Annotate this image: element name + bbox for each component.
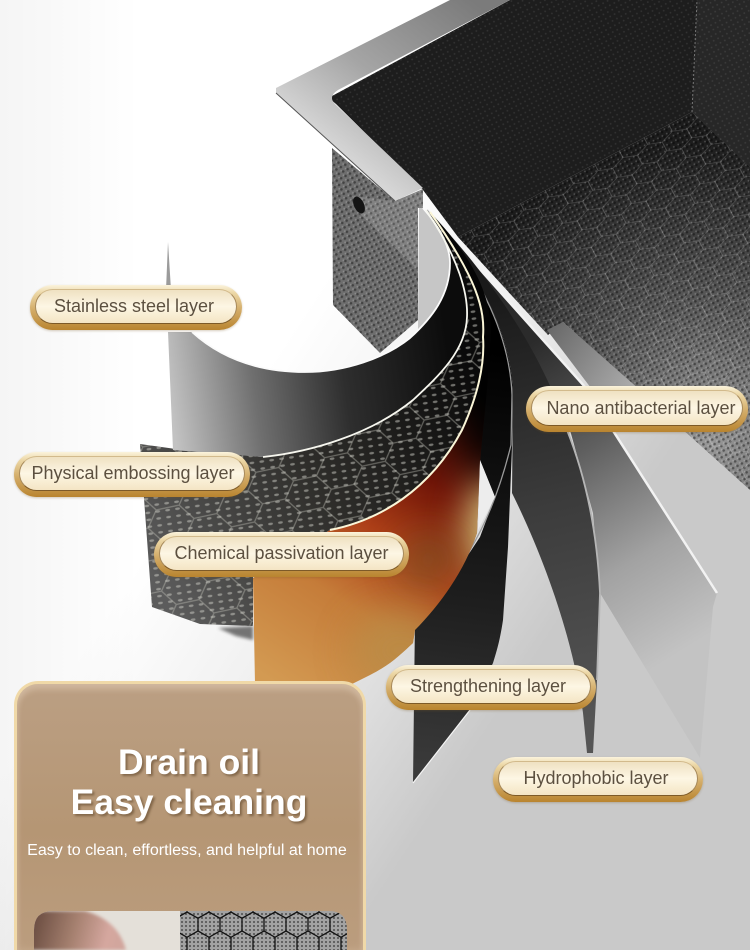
- sink basin: [276, 0, 750, 490]
- layer: chemical passivation sheet: [253, 212, 518, 690]
- back wall: [331, 0, 750, 237]
- layer: hydrophobic sheet: [427, 210, 717, 758]
- hexagon surface: [180, 911, 347, 950]
- heading: drain oil: Drain oil: [118, 742, 260, 782]
- label: stainless steel layer: [30, 285, 242, 330]
- label: hydrophobic layer: [493, 757, 703, 802]
- notch highlight: [478, 460, 495, 530]
- label: chemical passivation layer: Chemical passivation layer: [174, 543, 389, 563]
- layer: nano antibacterial sheet: [427, 210, 600, 753]
- layer: stainless steel sheet: [166, 208, 467, 457]
- heading: easy cleaning: Easy cleaning: [71, 782, 307, 822]
- layer: strengthening sheet: [413, 210, 513, 783]
- label: strengthening layer: Strengthening layer: [410, 676, 566, 696]
- colour blooms: [360, 401, 485, 678]
- right wall: [692, 0, 750, 167]
- basin floor: [458, 112, 750, 490]
- label: strengthening layer: [386, 665, 596, 710]
- subtitle: Easy to clean, effortless, and helpful at home: [27, 841, 347, 859]
- flange rim: [276, 0, 510, 201]
- inner face of steel: [418, 208, 450, 330]
- label: nano antibacterial layer: Nano antibacterial layer: [546, 398, 736, 418]
- drain hole: [351, 195, 367, 215]
- label: stainless steel layer: Stainless steel layer: [54, 296, 214, 316]
- label: physical embossing layer: [14, 452, 250, 497]
- photo: finger on textured surface: [34, 911, 347, 950]
- lower rim strip: [547, 322, 640, 400]
- label: nano antibacterial layer: [526, 386, 748, 432]
- label: physical embossing layer: Physical embossing layer: [31, 463, 235, 483]
- panel: drain oil easy cleaning: [14, 681, 366, 950]
- label: chemical passivation layer: [154, 532, 409, 577]
- steel top spike: [166, 242, 171, 290]
- finger: [30, 911, 126, 950]
- label: hydrophobic layer: Hydrophobic layer: [523, 768, 669, 788]
- outer side wall: [332, 148, 423, 353]
- embossing shadow smudge: [218, 626, 253, 640]
- layer: physical embossing sheet: [140, 210, 483, 640]
